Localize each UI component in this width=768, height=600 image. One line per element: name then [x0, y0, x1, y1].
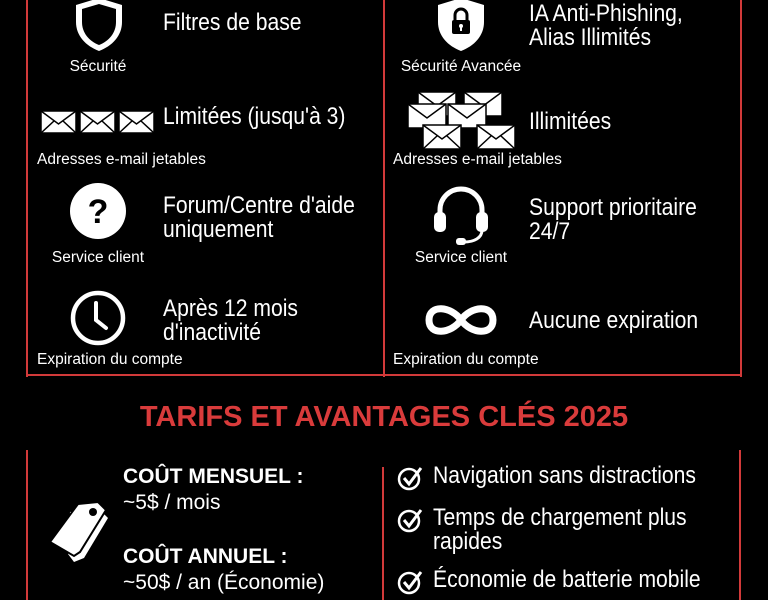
icon: headset	[434, 186, 488, 245]
text: limitees: Limitées (jusqu'à 3)	[163, 103, 345, 130]
text: IA anti-phishing: IA Anti-Phishing,	[529, 0, 683, 27]
text: IA anti-phishing: Alias Illimités	[529, 24, 651, 51]
text: cout annuel: COÛT ANNUEL :	[123, 545, 288, 568]
label: securite avancee: Sécurité Avancée	[401, 58, 521, 75]
icon: price tag	[52, 503, 108, 562]
panel: comparison box	[26, 0, 742, 377]
text: apres 12 mois: d'inactivité	[163, 319, 261, 346]
text: forum	[163, 192, 355, 243]
text: support: 24/7	[529, 218, 570, 245]
label: service client left: Service client	[52, 249, 144, 266]
text: apres 12 mois: Après 12 mois	[163, 295, 298, 322]
icon: clock	[70, 290, 126, 346]
title: tarifs: TARIFS ET AVANTAGES CLÉS 2025	[140, 401, 628, 433]
text: IA anti-phishing	[529, 0, 683, 51]
icon: infinity	[426, 305, 496, 335]
text: forum: Forum/Centre d'aide	[163, 192, 355, 219]
label: expiration left: Expiration du compte	[37, 351, 183, 368]
text: aucune expiration: Aucune expiration	[529, 307, 698, 334]
text: support	[529, 194, 697, 245]
panel: tarifs	[26, 450, 741, 600]
icon: many envelopes	[408, 92, 514, 148]
text: cout mensuel	[123, 464, 303, 514]
icon: question	[70, 183, 126, 239]
label: expiration right: Expiration du compte	[393, 351, 539, 368]
label: service client right: Service client	[415, 249, 507, 266]
text: filtres: Filtres de base	[163, 9, 302, 36]
icon: lock shield	[438, 0, 484, 51]
item: navigation: Navigation sans distractions	[433, 462, 696, 489]
label: adresses right: Adresses e-mail jetables	[393, 151, 562, 168]
text: cout annuel: ~50$ / an (Économie)	[123, 571, 324, 594]
item: temps: Temps de chargement plus	[433, 504, 687, 531]
text: support: Support prioritaire	[529, 194, 697, 221]
icon: question: ?	[88, 193, 108, 231]
text: illimitees: Illimitées	[529, 108, 611, 135]
item: temps	[398, 504, 687, 555]
icon: shield	[76, 0, 122, 51]
item: temps: rapides	[433, 528, 502, 555]
text: cout annuel	[123, 544, 324, 594]
text: apres 12 mois	[163, 295, 298, 346]
text: cout mensuel: COÛT MENSUEL :	[123, 465, 303, 488]
item: batterie: Économie de batterie mobile	[433, 566, 701, 593]
icon: three envelopes	[42, 112, 154, 132]
text: cout mensuel: ~5$ / mois	[123, 491, 220, 514]
label: securite: Sécurité	[70, 58, 126, 75]
list: avantages	[398, 462, 701, 594]
label: adresses left: Adresses e-mail jetables	[37, 151, 206, 168]
text: forum: uniquement	[163, 216, 273, 243]
